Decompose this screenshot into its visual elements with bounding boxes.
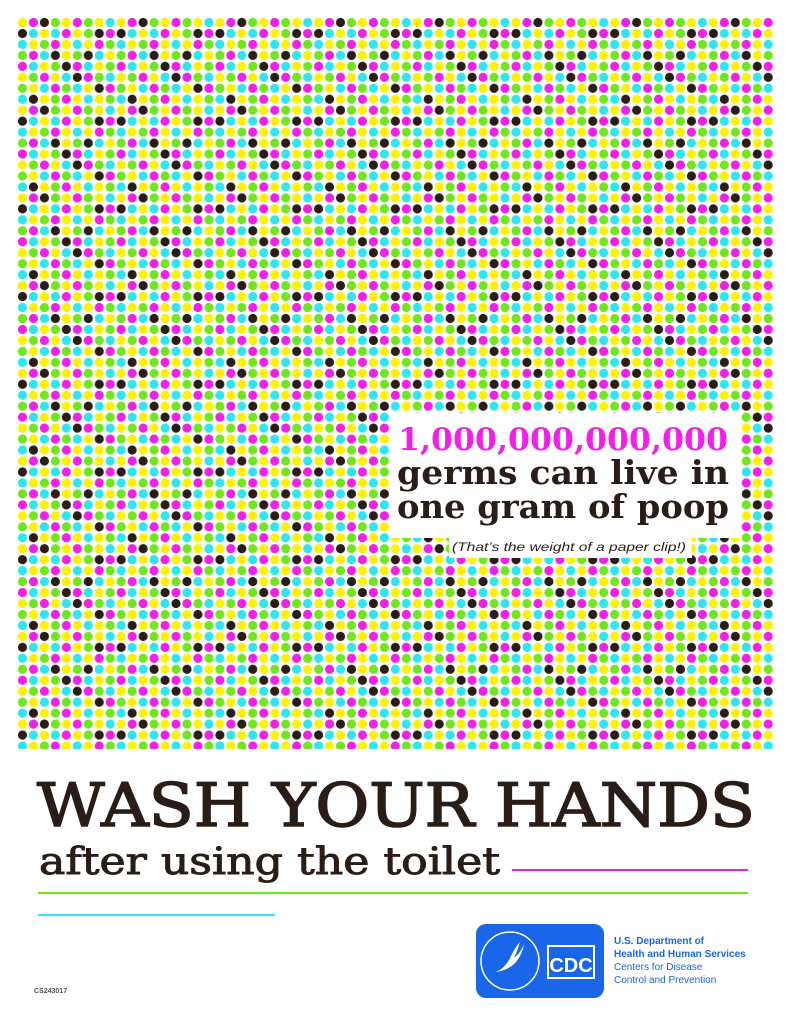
agency text — [614, 936, 746, 986]
subtitle: after using the toilet — [39, 840, 500, 883]
big number: 1,000,000,000,000 — [398, 422, 728, 458]
code: CS243017 — [34, 988, 67, 995]
logo: HHS and CDC — [476, 924, 604, 998]
dot grid panel — [17, 17, 774, 749]
fact text: germs can live in — [397, 453, 729, 492]
agency text: Centers for Disease — [614, 962, 703, 973]
callout: germ fact: one gram of poop — [397, 487, 729, 526]
caption: (That’s the weight of a paper clip!) — [452, 542, 686, 554]
agency text: U.S. Department of — [614, 936, 705, 947]
agency text: Health and Human Services — [614, 949, 746, 960]
title: WASH YOUR HANDS — [37, 771, 755, 841]
logo: HHS and CDC: CDC — [549, 955, 593, 977]
callout: germ fact — [390, 413, 740, 558]
agency text: Control and Prevention — [614, 975, 716, 986]
